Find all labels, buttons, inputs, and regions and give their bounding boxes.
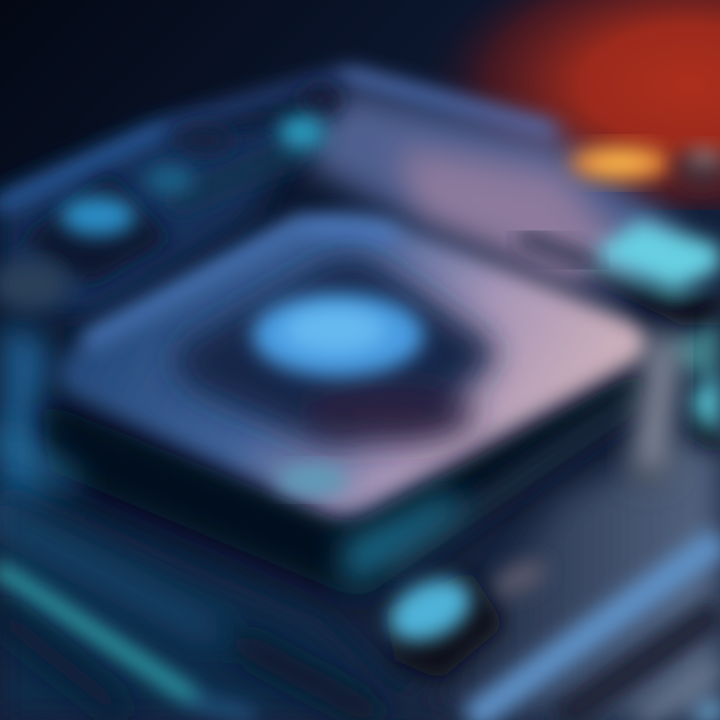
chip edge light [276, 465, 348, 495]
circuit traces: top edge [0, 75, 550, 205]
cyan lights: top left [60, 114, 326, 236]
chip side wall [40, 365, 650, 600]
lower floor surface [0, 430, 720, 720]
lower cyan button component [378, 554, 551, 680]
icon: right teal module [590, 220, 720, 325]
teal light strip under chip [340, 490, 465, 590]
lower left dim traces [0, 440, 370, 712]
chip top face [58, 214, 648, 515]
chip centre light [252, 293, 424, 377]
right edge modules [670, 320, 720, 455]
left board: blue circuit area [0, 120, 300, 540]
chip blue rim [90, 225, 390, 340]
upper board: pale purple surface behind the chip [300, 90, 680, 300]
small dark components: top and left [0, 84, 340, 309]
lower left teal traces [0, 570, 250, 716]
chip package [40, 214, 650, 600]
orange glow [570, 145, 670, 181]
dark connector leading to right module [525, 238, 590, 262]
small red-dark component: upper right [676, 148, 720, 188]
pale pillar connector [626, 345, 674, 482]
lower right diagonal traces [470, 540, 720, 720]
red glow: top right [400, 0, 720, 210]
chip dark inset [175, 256, 494, 448]
